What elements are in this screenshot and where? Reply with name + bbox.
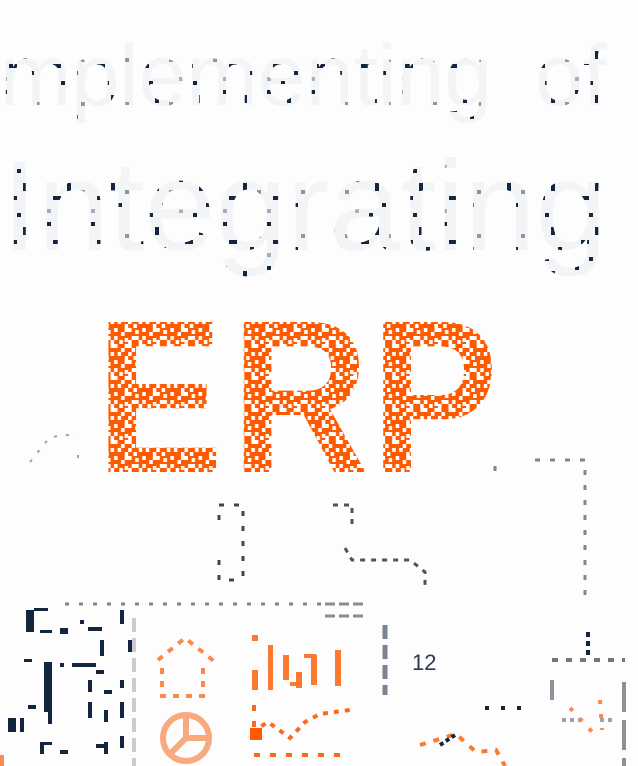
icon: line chart	[250, 705, 350, 755]
corner accent	[0, 755, 4, 766]
title line 2: Integrating	[2, 135, 607, 278]
left text block	[8, 608, 132, 754]
connector: left	[30, 434, 78, 465]
title accent: ERP: ERP	[96, 275, 498, 519]
orange diagram	[420, 708, 530, 766]
icon: house	[158, 638, 215, 696]
connector: centre right	[333, 505, 425, 586]
connector: centre left	[219, 505, 243, 580]
icon: bar chart	[252, 635, 341, 690]
title word 2: of	[535, 28, 608, 124]
dashed rows	[325, 604, 366, 616]
icon: pie chart	[163, 715, 209, 761]
monitor frame	[65, 604, 385, 766]
connector: top right	[495, 460, 585, 600]
small numeral: 12	[412, 650, 436, 675]
right device	[552, 632, 625, 766]
